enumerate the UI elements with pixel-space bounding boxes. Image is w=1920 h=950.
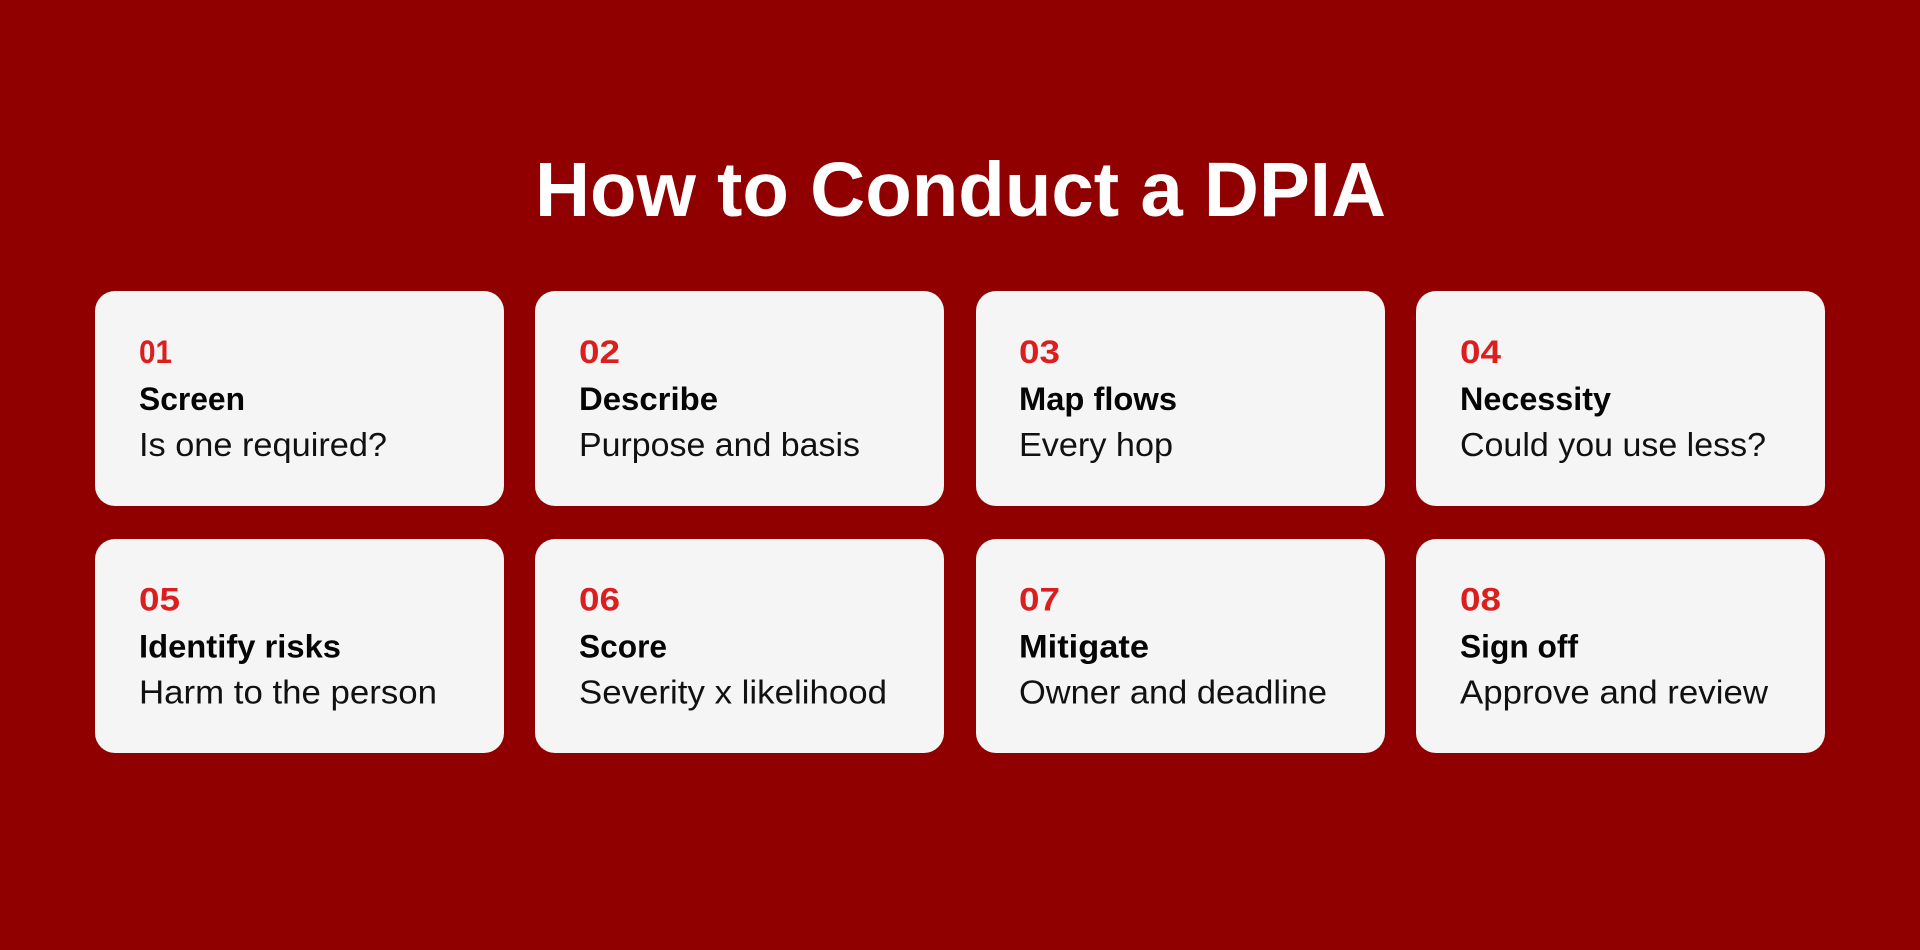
panel: step 07: 07	[1019, 582, 1060, 618]
panel: step 04	[1416, 291, 1825, 506]
panel: step 04: 04	[1460, 334, 1501, 370]
panel: step 02: Purpose and basis	[579, 426, 860, 463]
panel: step 02	[535, 291, 944, 506]
panel: step 06: Score	[579, 628, 667, 664]
panel: step 07: Mitigate	[1019, 628, 1149, 664]
panel: step 02: Describe	[579, 381, 718, 417]
panel: step 01	[95, 291, 504, 506]
panel: step 03: Every hop	[1019, 426, 1173, 463]
panel: step 08: Sign off	[1460, 628, 1578, 664]
panel: step 05	[95, 539, 504, 753]
panel: step 08: 08	[1460, 582, 1501, 618]
panel: step 04: Necessity	[1460, 381, 1611, 417]
panel: step 06: Severity x likelihood	[579, 674, 887, 710]
panel: step 05: Identify risks	[139, 628, 341, 664]
panel: step 01: Is one required?	[139, 426, 387, 463]
panel: step 07: Owner and deadline	[1019, 674, 1327, 710]
panel: step 05: 05	[139, 582, 180, 618]
panel: step 05: Harm to the person	[139, 674, 437, 710]
panel: step 03: Map flows	[1019, 381, 1177, 417]
panel: step 04: Could you use less?	[1460, 426, 1766, 463]
title: How to Conduct a DPIA	[535, 147, 1386, 233]
panel: step 03: 03	[1019, 334, 1060, 370]
panel: step 03	[976, 291, 1385, 506]
panel: step 07	[976, 539, 1385, 753]
panel: step 01: Screen	[139, 381, 245, 417]
panel: step 06: 06	[579, 582, 620, 618]
panel: step 06	[535, 539, 944, 753]
panel: step 08: Approve and review	[1460, 674, 1768, 710]
panel: step 02: 02	[579, 334, 620, 370]
panel: step 01: 01	[139, 334, 172, 370]
panel: step 08	[1416, 539, 1825, 753]
